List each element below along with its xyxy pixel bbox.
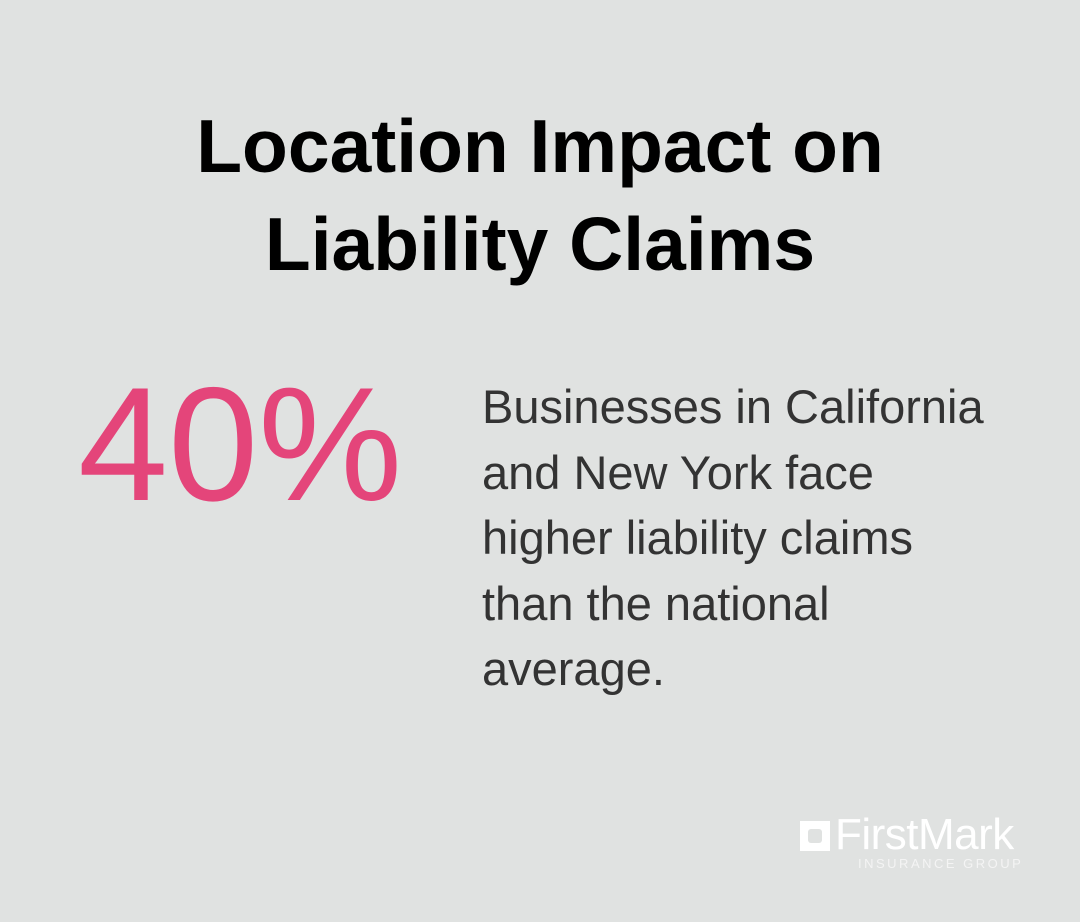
stat number: 40% [78,354,402,535]
icon: logo square [800,821,830,851]
description text: higher liability claims [482,511,913,564]
description text: average. [482,642,665,695]
logo wordmark: FirstMark [835,810,1014,859]
description text: and New York face [482,446,874,498]
description text: Businesses in California [482,380,984,433]
logo tagline: INSURANCE GROUP [858,856,1023,871]
title [196,104,884,286]
description text [482,380,984,695]
description text: than the national [482,576,830,630]
title: Location Impact on [196,104,884,188]
title: Liability Claims [265,202,815,286]
logo: FirstMark [800,810,1023,871]
